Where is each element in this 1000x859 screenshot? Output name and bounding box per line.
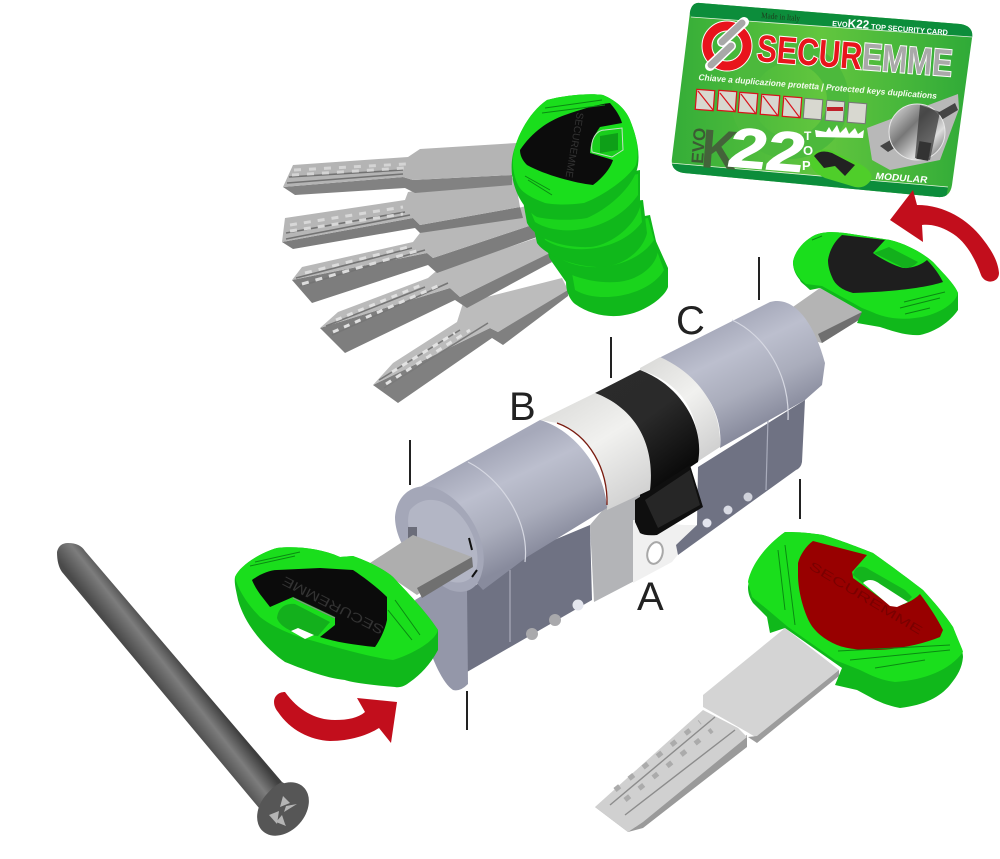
card: tagline: Chiave a duplicazione protetta | Protected keys duplications — [698, 72, 938, 101]
stacked green handles — [522, 170, 668, 316]
card: EVO K22 TOP wordmark — [688, 116, 813, 184]
green handle — [748, 532, 963, 708]
label C: C — [676, 299, 705, 343]
left lower body — [465, 525, 592, 672]
key 3 — [292, 205, 537, 303]
left barrel — [420, 420, 607, 590]
top handle — [512, 94, 639, 220]
screw — [57, 543, 319, 846]
black cam — [635, 465, 703, 535]
card: EVO K22 TOP wordmark: K — [699, 117, 740, 182]
black cap — [828, 235, 943, 293]
card: brand name: SECUREMME — [755, 28, 954, 85]
label A: A — [637, 575, 664, 619]
card: EVO K22 TOP wordmark: 22 — [724, 116, 811, 184]
blade — [595, 710, 747, 832]
right barrel — [655, 301, 825, 448]
card: white key profile — [815, 125, 864, 138]
black ring — [595, 370, 699, 500]
card: made in italy: Made in Italy — [761, 10, 801, 23]
finger hole — [277, 604, 330, 636]
brand on red cap: SECUREMME — [806, 559, 925, 638]
rotation arrow: right key to card — [890, 190, 999, 282]
green handle — [793, 232, 958, 335]
key shank — [370, 535, 473, 598]
card: feature icons — [695, 89, 867, 124]
brand on left key: SECUREMME — [279, 573, 386, 638]
left key with black cap — [235, 535, 473, 687]
card: EVO K22 TOP wordmark: T — [804, 129, 812, 143]
right key with black cap — [790, 232, 958, 343]
brand on top key: SECUREMME — [563, 111, 585, 179]
finger hole — [853, 567, 912, 605]
red cap — [798, 541, 943, 650]
card: modular label: MODULAR — [874, 171, 929, 186]
security card — [672, 2, 972, 198]
first white ring — [540, 393, 651, 510]
card: cylinder photo — [867, 94, 959, 170]
finger hole — [874, 247, 918, 268]
white bridge with cam hole — [633, 520, 697, 583]
second white ring — [640, 357, 720, 462]
card: product title: EVOK22 TOP SECURITY CARD — [832, 15, 949, 38]
callout ticks — [410, 257, 800, 730]
cylinder end face — [395, 486, 484, 592]
black cap — [252, 568, 387, 647]
spare key with red cap — [595, 532, 963, 832]
key fan: five keys on green handles — [282, 94, 668, 403]
right lower body — [676, 400, 805, 555]
key 4 — [320, 235, 552, 353]
centre body — [590, 488, 650, 602]
card: logo mark — [707, 22, 747, 66]
front plate — [415, 585, 468, 690]
shank — [703, 628, 839, 743]
green handle — [235, 547, 438, 687]
lock cylinder — [395, 301, 825, 690]
card: mini key — [810, 150, 872, 187]
key 5 — [373, 278, 568, 403]
key 1 — [283, 143, 517, 195]
screw drive recess — [269, 796, 297, 826]
card: EVO K22 TOP wordmark: P — [802, 158, 811, 173]
card: EVO K22 TOP wordmark: EVO — [688, 127, 709, 164]
key shank — [790, 288, 862, 343]
key 2 — [282, 178, 523, 249]
rotation arrow: left key — [274, 692, 397, 743]
label B: B — [509, 385, 536, 429]
card: EVO K22 TOP wordmark: O — [803, 143, 813, 158]
